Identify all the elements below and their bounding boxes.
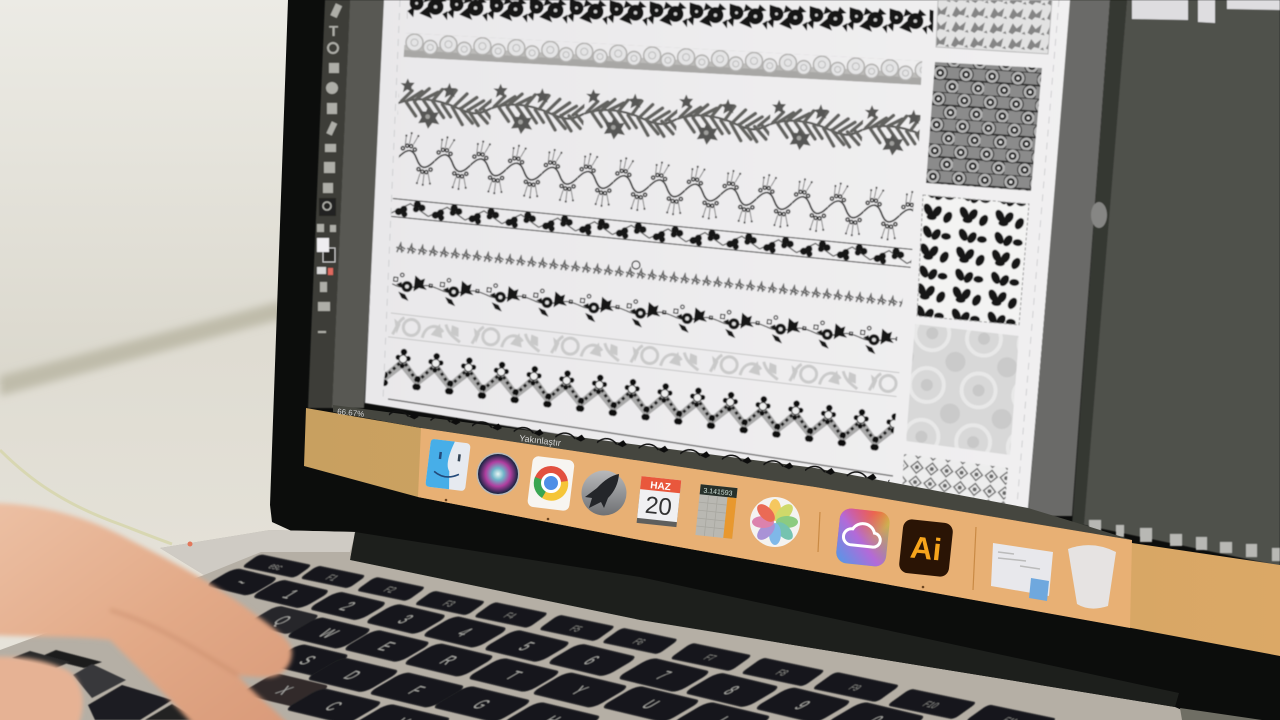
laptop lid bezel — [270, 0, 1280, 720]
toolbar icons: T — [329, 23, 338, 40]
laptop base — [0, 530, 1205, 720]
swatch 1: pale lattice — [936, 0, 1052, 54]
letter key row QWERTY: T — [500, 668, 528, 682]
letter key row QWERTY: E — [372, 639, 401, 653]
letter key row QWERTY — [245, 605, 772, 720]
number key row: 3 — [392, 612, 420, 626]
left toolbar — [308, 0, 350, 408]
background wall — [0, 0, 320, 395]
letter key row ASDF: S — [293, 653, 322, 667]
function key row: F1 — [322, 573, 341, 583]
upper deck highlight — [160, 530, 356, 575]
function key row: F5 — [566, 624, 585, 634]
icon: illustrator — [898, 519, 954, 577]
function key row: F6 — [629, 637, 648, 647]
hinge right foot — [1180, 708, 1262, 720]
letter key row ASDF: D — [338, 668, 367, 682]
letter key row ASDF: F — [403, 683, 431, 697]
keyboard — [12, 555, 1056, 720]
page margin guide right — [1017, 0, 1059, 505]
grey panel gutter — [1028, 0, 1110, 516]
letter key row ASDF — [266, 644, 602, 720]
dock background — [418, 428, 1132, 628]
lower finger — [0, 657, 83, 720]
ornament band 3: leaf garland — [397, 75, 921, 161]
ornament band 1: roses — [407, 0, 934, 37]
desk surface — [0, 306, 290, 720]
canvas backdrop — [332, 0, 386, 408]
letter key row QWERTY: Y — [565, 683, 594, 697]
icon: document stack — [991, 543, 1053, 601]
number key row: 5 — [513, 639, 541, 653]
second dock separator — [973, 527, 976, 590]
application status bar — [333, 405, 1132, 540]
ornament band 2: grey roses — [404, 33, 922, 85]
charging cable — [0, 450, 172, 544]
letter key row ASDF: G — [467, 697, 497, 712]
function key row: F2 — [380, 585, 399, 595]
letter key row QWERTY: W — [313, 626, 345, 641]
number key row: 9 — [789, 698, 817, 712]
number key row: 8 — [718, 683, 746, 697]
ornament band 9: scalloped lace — [383, 343, 897, 455]
function key row: F10 — [919, 700, 942, 710]
hand — [0, 503, 292, 720]
function key row: F8 — [772, 668, 791, 678]
function key row: F9 — [845, 683, 864, 693]
wall and desk edge shadow — [0, 300, 285, 396]
icon: calculator — [695, 484, 738, 539]
panel divider — [1072, 0, 1127, 525]
ornament band 7: floral vine — [390, 268, 899, 357]
number key row: 1 — [277, 587, 305, 601]
top right thumbnails — [1132, 0, 1280, 23]
swatch 2: dark lace — [926, 62, 1042, 191]
swatch 5: diamond lattice — [902, 454, 1008, 506]
ornament band 6: thin grey strip — [395, 241, 903, 309]
number key row: ~ — [228, 575, 256, 589]
icon: chrome — [527, 456, 575, 511]
letter key row ZXCV: X — [270, 683, 299, 697]
icon: trash — [1068, 545, 1116, 609]
dock running indicators — [445, 499, 924, 588]
swatch 4: pale lace — [906, 324, 1019, 455]
function key row — [243, 555, 1056, 720]
crease between fingers — [110, 610, 238, 675]
letter key row ZXCV: C — [319, 699, 348, 713]
icon: finder — [425, 439, 471, 491]
letter key row QWERTY: U — [636, 697, 665, 711]
tooltip label: Yakınlaştır — [519, 433, 562, 448]
scroll handle — [1091, 202, 1107, 228]
icon: calendar: 20 — [644, 492, 673, 521]
letter key row ZXCV — [239, 673, 452, 720]
letter key row QWERTY: R — [434, 653, 463, 667]
scallops on the status bar — [388, 405, 891, 484]
zoom status text: 66.67% — [337, 407, 365, 419]
number key row: 7 — [650, 668, 678, 682]
artboard page — [365, 0, 1071, 510]
ornament band 10: rule line — [388, 399, 893, 476]
keys beside the hand — [12, 650, 200, 720]
ornament band 4: scalloped wave — [395, 130, 915, 246]
ornament band 5: dark floral strip — [391, 197, 913, 269]
swatch 3: black floral — [917, 195, 1029, 325]
panel bottom icons — [1089, 520, 1280, 561]
icon: calendar: HAZ — [650, 480, 671, 493]
power indicator — [188, 542, 192, 546]
icon: siri — [476, 452, 520, 496]
number key row — [206, 568, 926, 720]
toolbar icons — [317, 3, 342, 333]
dock — [418, 428, 1132, 628]
laptop screen — [308, 0, 1280, 566]
cursor — [632, 261, 640, 269]
first dock separator — [818, 512, 820, 552]
desktop wallpaper — [304, 408, 1280, 656]
icon: calculator: 3.141593 — [703, 488, 733, 498]
ornament band 8: pale floral strip — [388, 312, 900, 398]
right dark panel — [1084, 0, 1280, 566]
laptop hinge — [350, 532, 1179, 707]
letter key row QWERTY: Q — [268, 613, 298, 628]
icon: photos — [750, 497, 800, 547]
icon: illustrator: Ai — [909, 529, 943, 568]
icon: creative cloud — [835, 508, 891, 567]
number key row: 4 — [451, 625, 479, 639]
icon: calendar — [637, 476, 681, 527]
function key row: F4 — [500, 611, 519, 621]
icon: launchpad rocket — [582, 470, 626, 516]
page margin guide left — [383, 0, 400, 400]
number key row: 6 — [578, 653, 606, 667]
aluminium deck — [0, 530, 1205, 720]
number key row: 2 — [334, 599, 362, 613]
function key row: F7 — [700, 653, 719, 663]
function key row: esc — [264, 562, 286, 572]
palm with index and middle fingers — [0, 503, 292, 720]
function key row: F3 — [439, 599, 458, 609]
